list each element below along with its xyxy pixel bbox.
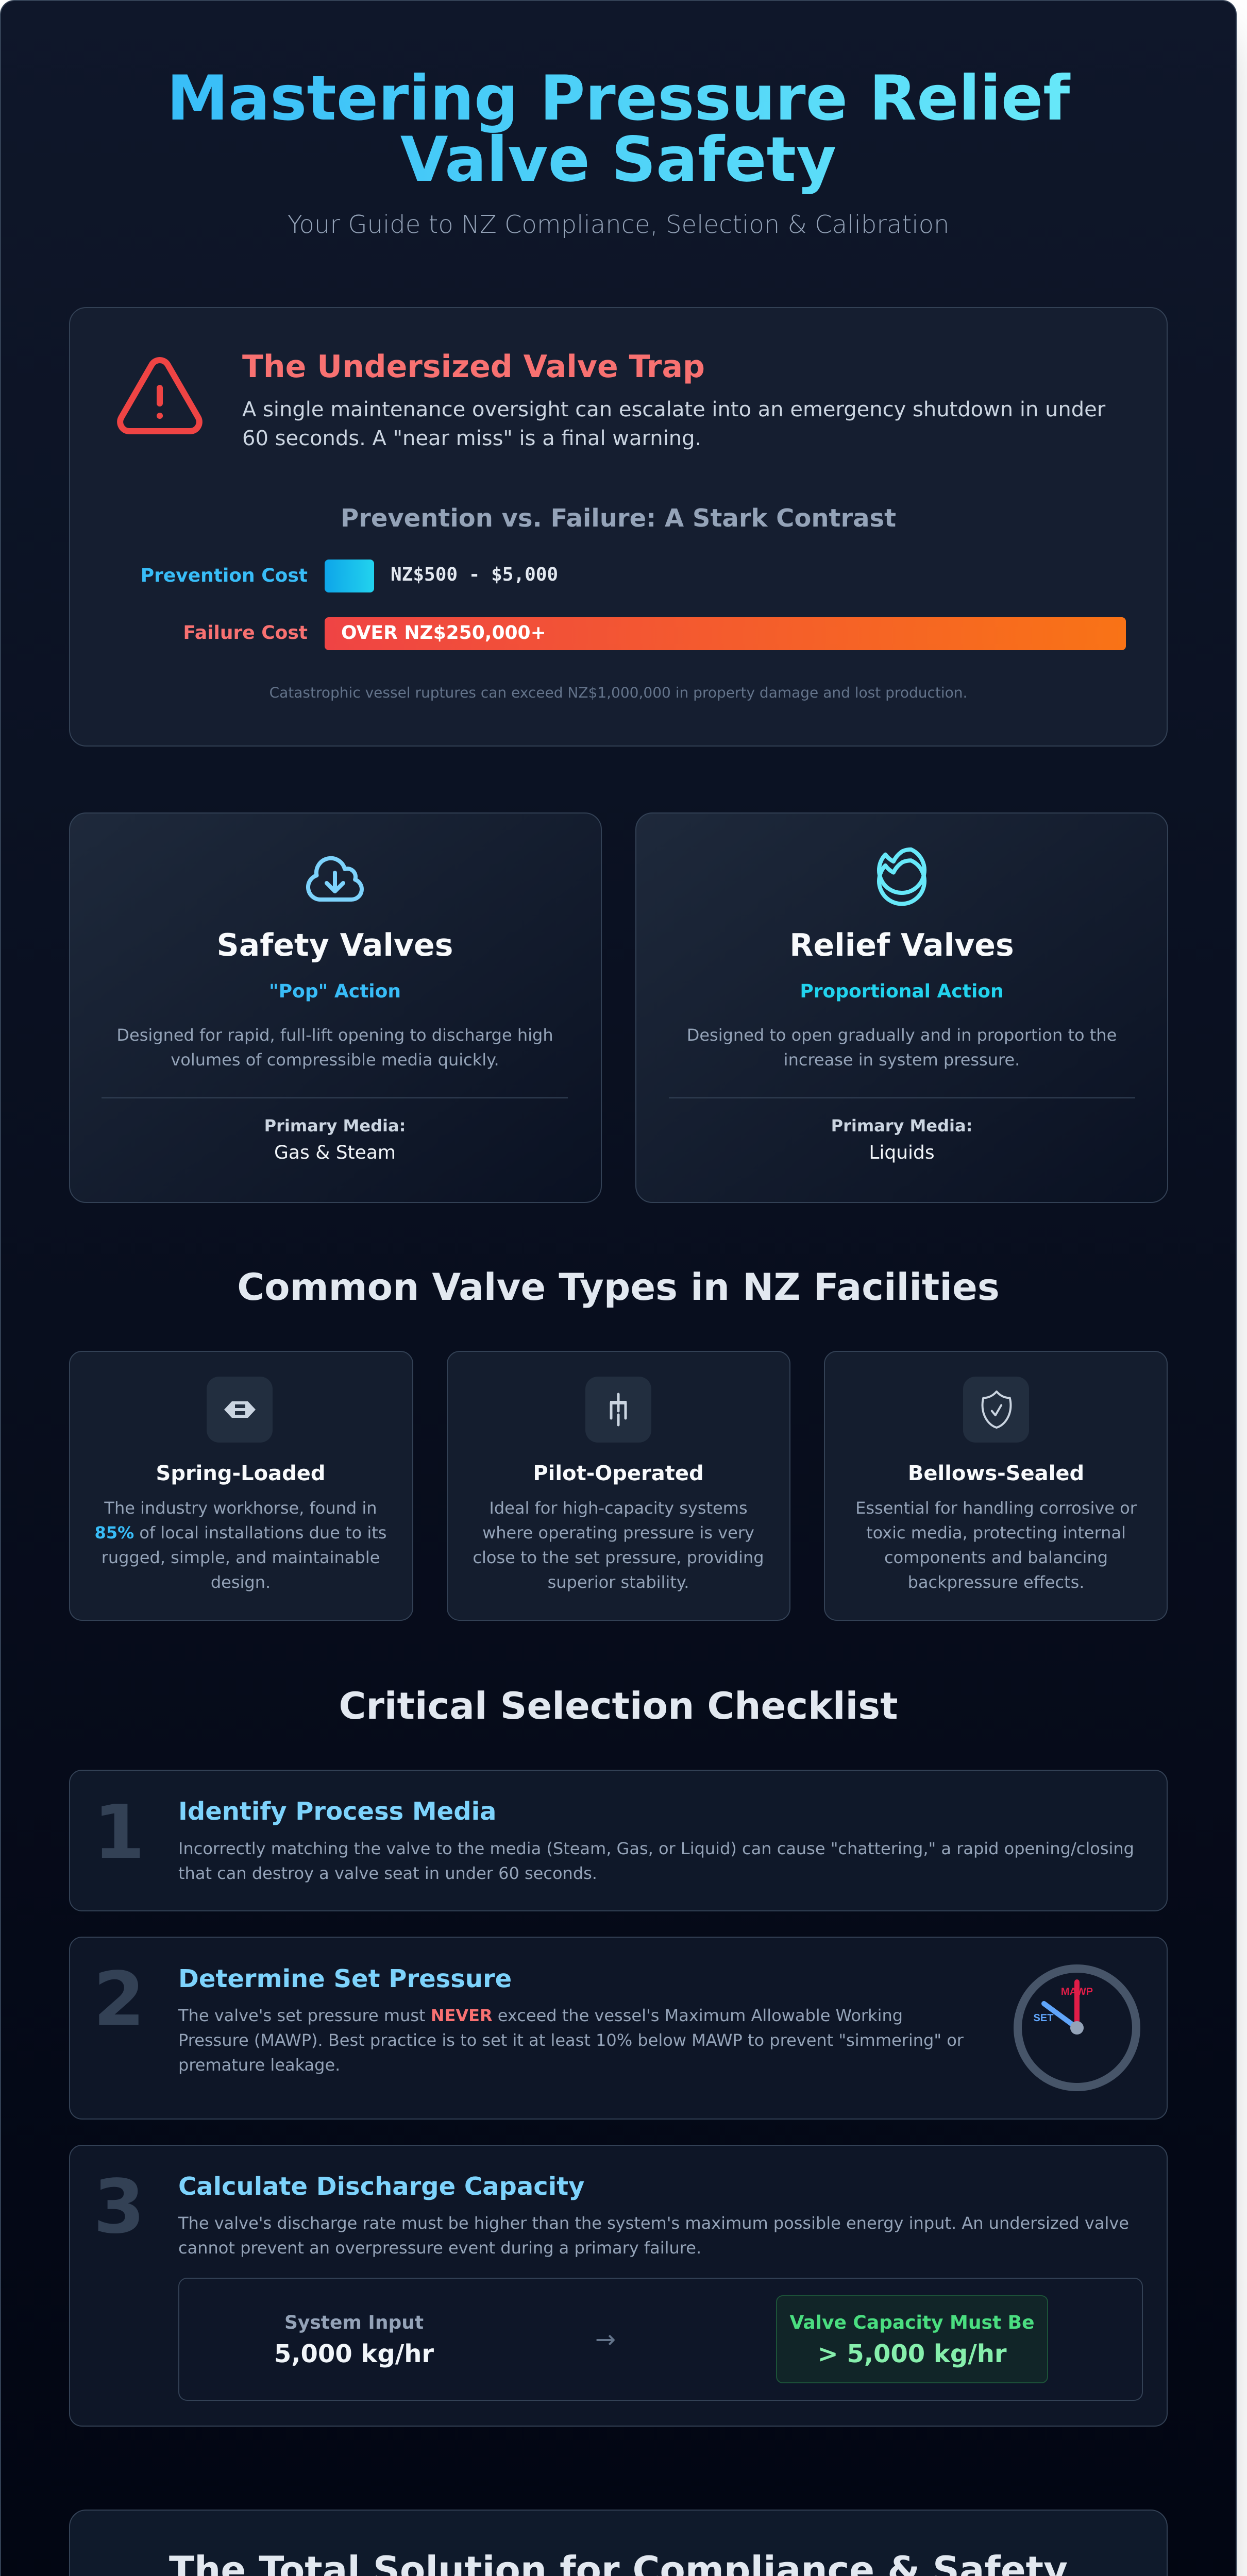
bar: failure [325,617,1126,650]
step description: The valve's discharge rate must be higher than the system's maximum possible energy input. An undersized valve [178,2213,1129,2233]
description: Ideal for high-capacity systems [489,1498,748,1518]
note: catastrophic ruptures: Catastrophic vessel ruptures can exceed NZ$1,000,000 in property damage and lost production. [269,684,967,701]
panel: safety valves [70,813,601,1202]
subtitle: Your Guide to NZ Compliance, Selection & Calibration [288,210,949,239]
description: where operating pressure is very [482,1523,754,1543]
description: volumes of compressible media quickly. [171,1050,499,1070]
subheading: "Pop" Action [269,981,401,1002]
icon: cloud arrow down [308,858,362,900]
panel: pilot-operated [447,1351,790,1620]
valve capacity callout: > 5,000 kg/hr [817,2340,1007,2368]
gauge needle: MAWP [1074,1982,1080,2028]
description: close to the set pressure, providing [473,1548,764,1567]
valve capacity callout [777,2296,1048,2383]
description: rugged, simple, and maintainable [102,1548,380,1567]
header [167,63,1071,239]
primary media: Primary Media: [831,1116,972,1136]
arrow: → [595,2325,616,2354]
bar: prevention [325,560,374,592]
heading: prevention vs failure: Prevention vs. Failure: A Stark Contrast [341,504,896,533]
step number: 3 [93,2163,145,2250]
description: Essential for handling corrosive or [855,1498,1137,1518]
panel: total solution [70,2510,1167,2576]
title: Valve Safety [400,124,836,196]
description: Designed to open gradually and in proportion to the [687,1025,1117,1045]
gauge label: set: SET [1034,2012,1053,2024]
valve capacity callout: Valve Capacity Must Be [789,2312,1035,2333]
gauge label: MAWP: MAWP [1061,1986,1093,1997]
step number: 1 [93,1789,145,1875]
panel: bellows-sealed [824,1351,1167,1620]
step description: Incorrectly matching the valve to the media (Steam, Gas, or Liquid) can cause "chattering," a rapid opening/closing [178,1839,1134,1858]
heading: common valve types: Common Valve Types in NZ Facilities [237,1265,1000,1309]
primary media: Liquids [869,1142,935,1163]
heading: Relief Valves [789,927,1014,963]
label: prevention cost: Prevention Cost [141,565,308,586]
gauge [1018,1969,1136,2087]
icon: shield check [963,1377,1029,1443]
panel: step 1 [70,1770,1167,1911]
step description: that can destroy a valve seat in under 60 seconds. [178,1863,597,1883]
text: trap description: 60 seconds. A "near miss" is a final warning. [242,427,701,450]
panel: step 3 [70,2145,1167,2426]
system input: System Input [284,2312,424,2333]
value: prevention cost: NZ$500 - $5,000 [391,564,558,585]
step title: Calculate Discharge Capacity [178,2172,584,2201]
heading: Spring-Loaded [156,1462,325,1485]
gauge hub [1070,2021,1084,2035]
panel: relief valves [636,813,1168,1202]
label: failure cost: Failure Cost [183,622,308,643]
panel: undersized valve trap [70,308,1167,746]
description: The industry workhorse, found in [104,1498,377,1518]
description: Designed for rapid, full-lift opening to discharge high [116,1025,553,1045]
description: superior stability. [548,1572,689,1592]
step number: 2 [93,1956,145,2042]
title: Mastering Pressure Relief [167,63,1071,134]
panel: step 2 [70,1937,1167,2119]
description: toxic media, protecting internal [866,1523,1126,1543]
primary media: Primary Media: [264,1116,406,1136]
system input: 5,000 kg/hr [274,2340,434,2368]
gauge needle: set [1044,2004,1077,2028]
description: components and balancing [884,1548,1108,1567]
description: 85% of local installations due to its [95,1523,386,1543]
panel: spring-loaded [70,1351,413,1620]
heading: Pilot-Operated [533,1462,704,1485]
subheading: Proportional Action [800,981,1004,1002]
step title: Determine Set Pressure [178,1964,512,1993]
step description: The valve's set pressure must NEVER exceed the vessel's Maximum Allowable Working [178,2006,903,2025]
heading: Safety Valves [217,927,453,963]
step title: Identify Process Media [178,1797,496,1826]
value: failure cost: OVER NZ$250,000+ [341,622,546,643]
step description: premature leakage. [178,2055,340,2075]
step description: Pressure (MAWP). Best practice is to set it at least 10% below MAWP to prevent "simmering" or [178,2030,964,2050]
description: backpressure effects. [908,1572,1084,1592]
icon: flame [879,850,924,904]
icon: warning triangle [120,360,199,431]
heading: the undersized valve trap: The Undersized Valve Trap [242,349,705,385]
icon: pilot-operated [585,1377,651,1443]
primary media: Gas & Steam [274,1142,396,1163]
description: design. [211,1572,271,1592]
step description: cannot prevent an overpressure event during a primary failure. [178,2238,701,2258]
capacity comparison box [179,2278,1142,2400]
heading: critical selection checklist: Critical Selection Checklist [339,1684,898,1727]
bar chart: cost comparison [141,560,1126,650]
heading: Bellows-Sealed [908,1462,1084,1485]
text: trap description: A single maintenance oversight can escalate into an emergency shutdown in under [242,398,1106,421]
description: increase in system pressure. [784,1050,1020,1070]
icon: spring-loaded [207,1377,273,1443]
